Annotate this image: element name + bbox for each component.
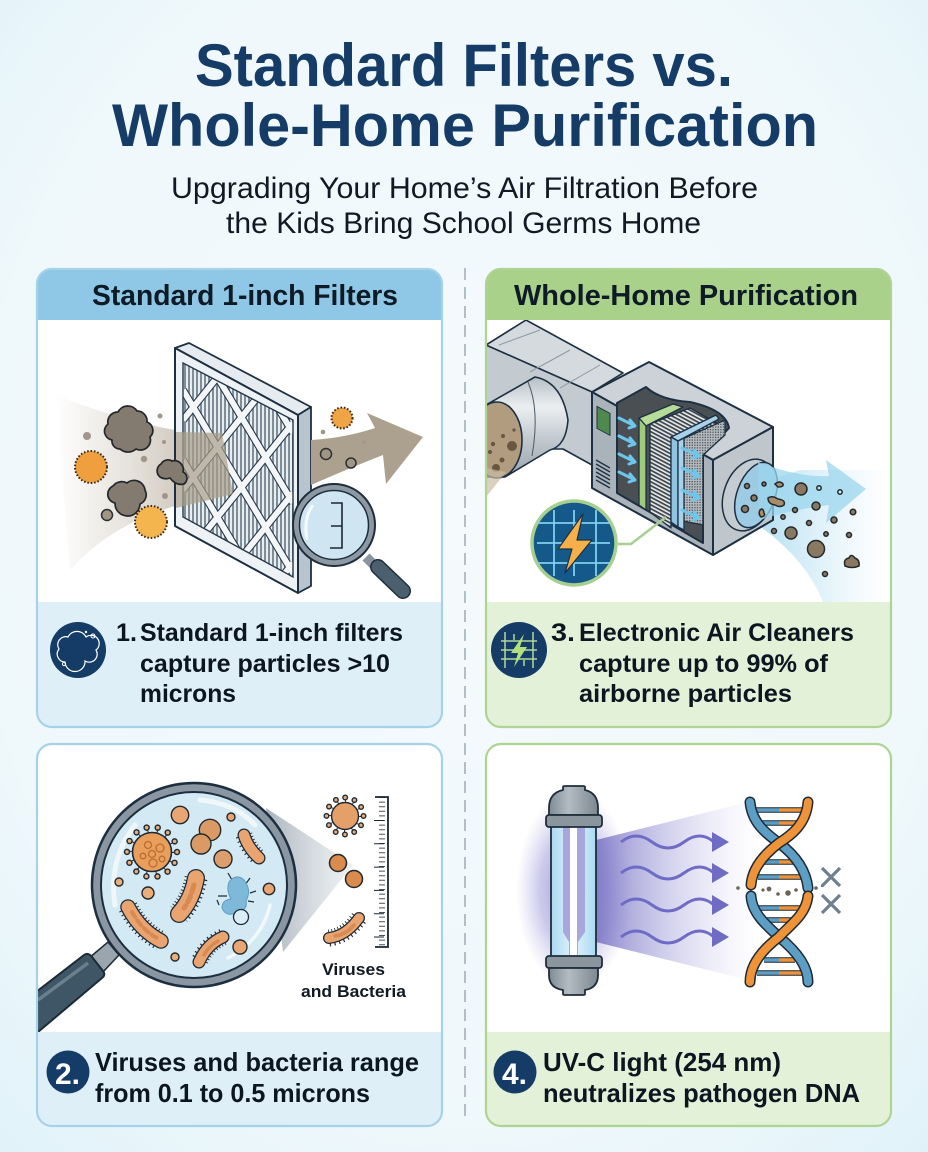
panel: whole-home purification: [472, 269, 891, 727]
caption text 2: [95, 1047, 419, 1108]
title: [112, 32, 818, 159]
illustration: air passing through a pleated filter: [72, 342, 423, 599]
header: whole-home: Whole-Home Purification: [514, 280, 858, 312]
air cleaner cabinet: [592, 362, 773, 555]
outlet collar: [722, 458, 778, 532]
caption text 1: Standard 1-inch filters: [140, 619, 403, 647]
DNA helix: [750, 802, 808, 982]
magnifier handle: [36, 942, 119, 1032]
orange spores: [75, 408, 352, 538]
number badge 2: 2.: [55, 1058, 80, 1091]
subtitle: [171, 172, 758, 240]
inset callout line: [618, 517, 666, 544]
caption text 3: Electronic Air Cleaners: [579, 619, 854, 647]
caption text 4: [543, 1047, 860, 1108]
filtered air arrow: [311, 413, 423, 485]
label: viruses and bacteria: Viruses: [322, 960, 385, 979]
caption text 1: capture particles >10: [140, 650, 390, 678]
magnifier lens: [92, 783, 296, 987]
illustration: electronic air cleaner: [472, 320, 890, 602]
UV glow: [516, 790, 632, 990]
header: whole-home: [486, 269, 891, 320]
column divider: [464, 268, 466, 1118]
DNA rungs: [756, 810, 802, 973]
caption text 3: [551, 619, 854, 708]
caption 1: [37, 602, 442, 727]
dust clumps: [104, 406, 187, 516]
UV beam: [596, 799, 760, 983]
large virus: [127, 827, 177, 877]
caption text 1: [116, 619, 403, 708]
subtitle: the Kids Bring School Germs Home: [226, 207, 701, 240]
label: viruses and bacteria: and Bacteria: [301, 982, 407, 1001]
caption text 1: 1.: [116, 619, 137, 647]
icon: dust cloud: [50, 622, 106, 678]
ruler: [375, 797, 388, 947]
blue air haze: [762, 470, 866, 602]
bacteria in lens: [128, 835, 259, 962]
orange particles in lens: [115, 806, 275, 961]
DNA fragments: [736, 885, 823, 896]
blue airflow arrows: [619, 418, 699, 520]
illustration: UV lamp and DNA: [516, 786, 840, 995]
small bacterium: [329, 918, 359, 938]
caption text 3: capture up to 99% of: [579, 650, 829, 678]
small virus: [326, 798, 364, 834]
dust in duct: [488, 428, 517, 472]
UV wave arrows: [621, 832, 729, 947]
caption 4: [486, 1032, 891, 1126]
DNA strands: [750, 802, 808, 982]
inset: charged grid: [532, 501, 616, 585]
caption text 2: from 0.1 to 0.5 microns: [95, 1078, 370, 1108]
label: viruses and bacteria: [302, 963, 406, 997]
caption text 3: 3.: [551, 619, 575, 647]
title: Whole-Home Purification: [112, 92, 818, 159]
dirty air haze: [72, 402, 174, 566]
size comparison spheres: [330, 854, 362, 888]
title: Standard Filters vs.: [195, 32, 733, 99]
icon: electric grid: [491, 622, 547, 678]
panel: viruses and bacteria: [36, 744, 442, 1126]
caption text 4: neutralizes pathogen DNA: [543, 1078, 860, 1108]
number badge 2: [46, 1050, 90, 1094]
caption text 1: microns: [140, 680, 236, 708]
header: standard filters: Standard 1-inch Filters: [92, 280, 398, 312]
caption 2: [37, 1032, 442, 1126]
number badge 4: 4.: [502, 1058, 527, 1091]
control panel and vents: [596, 406, 610, 488]
ductwork: [472, 320, 623, 478]
small particles: [83, 414, 366, 499]
panel: UV-C light: [486, 744, 891, 1126]
blue collector cell: [671, 415, 725, 530]
illustration: magnified microbes: [36, 783, 407, 1032]
panel: standard 1-inch filters: [37, 250, 442, 727]
mesh pre-filter in green frame: [639, 404, 720, 528]
caption 3: [486, 602, 891, 727]
caption text 2: Viruses and bacteria range: [95, 1047, 419, 1077]
pleated filter: [174, 342, 312, 594]
clean air arrow: [758, 460, 866, 523]
subtitle: Upgrading Your Home’s Air Filtration Before: [171, 172, 758, 205]
magnifier: [293, 484, 403, 591]
number badge 4: [494, 1050, 536, 1094]
damage marks: [822, 868, 840, 913]
caption text 3: airborne particles: [579, 680, 792, 708]
UV lamp: [546, 786, 602, 995]
haze over filter: [176, 432, 233, 508]
header: standard filters: [37, 269, 442, 320]
captured particles: [742, 482, 859, 576]
blue microbe: [217, 873, 256, 924]
cone of view: [266, 808, 353, 952]
caption text 4: UV-C light (254 nm): [543, 1047, 781, 1077]
